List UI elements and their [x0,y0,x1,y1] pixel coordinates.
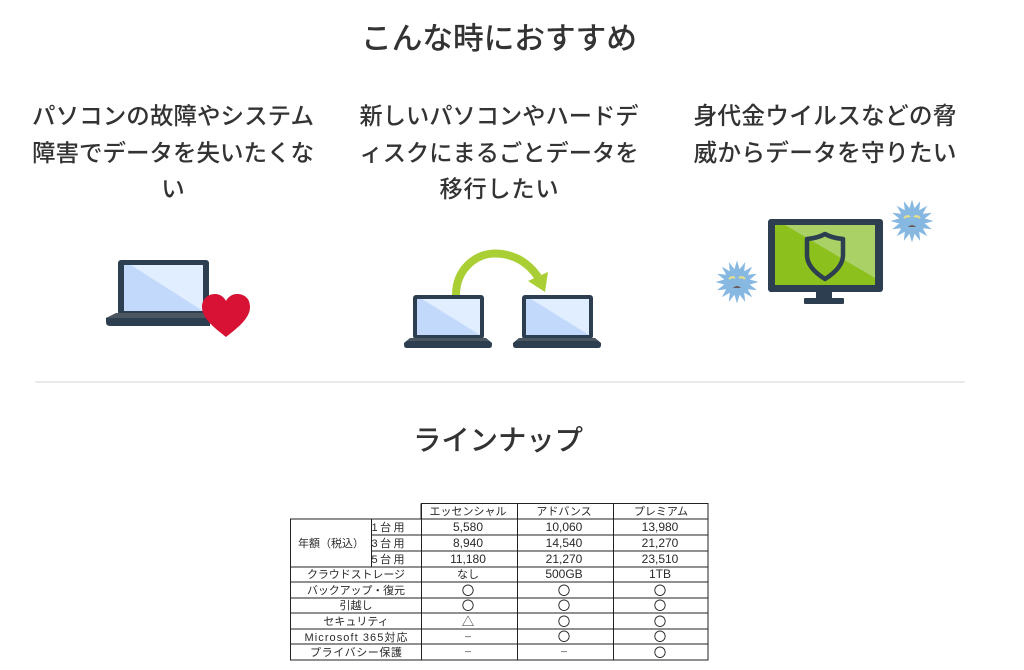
text: protect from ransomware: 威からデータを守りたい [694,139,956,167]
feature rows: 〇 [654,615,666,629]
column headers: エッセンシャル [430,505,506,518]
text: prevent data loss: 障害でデータを失いたくな [32,139,314,166]
text: prevent data loss: パソコンの故障やシステム [32,103,314,129]
feature rows: △ [462,615,475,629]
feature rows: セキュリティ [323,615,389,628]
annual price rows: 21,270 [546,552,583,566]
feature rows: 〇 [654,599,666,613]
icon: monitor with shield [768,219,883,304]
text: migrate to new PC: ィスクにまるごとデータを [360,140,638,166]
annual price rows: 10,060 [546,520,583,534]
icon: right laptop [513,295,601,348]
title: recommended situations: こんな時におすすめ [361,21,637,56]
feature rows: 500GB [545,567,583,581]
feature rows: 引越し [340,598,372,612]
feature rows: プライバシー保護 [310,645,402,659]
table: lineup comparison [290,503,708,660]
annual price rows: 11,180 [450,552,486,566]
panel: prevent data loss [32,103,314,337]
feature rows: クラウドストレージ [307,568,405,581]
feature rows: 〇 [558,630,570,644]
feature rows: － [464,632,472,642]
icon: virus left [716,260,758,304]
feature rows: 〇 [558,599,570,613]
annual price rows [298,520,679,566]
divider [35,381,965,383]
feature rows: 〇 [654,646,666,660]
column headers: アドバンス [536,505,592,518]
text: prevent data loss: い [161,176,185,202]
arrow: data transfer [456,254,548,295]
panel: migrate to new PC [360,103,638,348]
feature rows: Microsoft 365対応 [304,631,408,644]
annual price rows: 8,940 [453,536,483,550]
column headers: プレミアム [634,505,688,518]
panel: protect from ransomware [694,103,956,304]
icon: virus right [890,200,934,242]
feature rows: － [560,647,568,657]
text: prevent data loss [32,103,314,202]
feature rows [304,567,671,660]
text: migrate to new PC [360,103,638,202]
icon: left laptop [404,295,492,348]
annual price rows: 13,980 [642,520,679,534]
annual price rows: 14,540 [546,536,583,550]
feature rows: 〇 [654,630,666,644]
feature rows: 〇 [654,584,666,598]
annual price rows: 21,270 [642,536,679,550]
annual price rows: 3台用 [372,536,404,550]
feature rows: 〇 [462,584,474,598]
feature rows: バックアップ・復元 [307,584,405,597]
annual price rows: 5台用 [372,552,404,566]
feature rows: 〇 [558,615,570,629]
feature rows: なし [457,568,479,581]
annual price rows: 23,510 [642,552,679,566]
feature rows: 〇 [558,584,570,598]
text: migrate to new PC: 新しいパソコンやハードデ [360,103,638,129]
feature rows: 〇 [462,599,474,613]
table grid [290,503,708,660]
annual price rows: 5,580 [453,520,483,534]
text: protect from ransomware [694,103,956,167]
heading: lineup: ラインナップ [413,425,583,457]
text: protect from ransomware: 身代金ウイルスなどの脅 [694,103,956,130]
feature rows: － [464,647,472,657]
column headers [430,505,688,518]
annual price rows: 1台用 [372,520,404,534]
feature rows: 1TB [649,567,671,581]
icon: laptop with heart [106,260,250,337]
text: migrate to new PC: 移行したい [440,176,558,202]
annual price rows: 年額（税込） [298,536,364,550]
